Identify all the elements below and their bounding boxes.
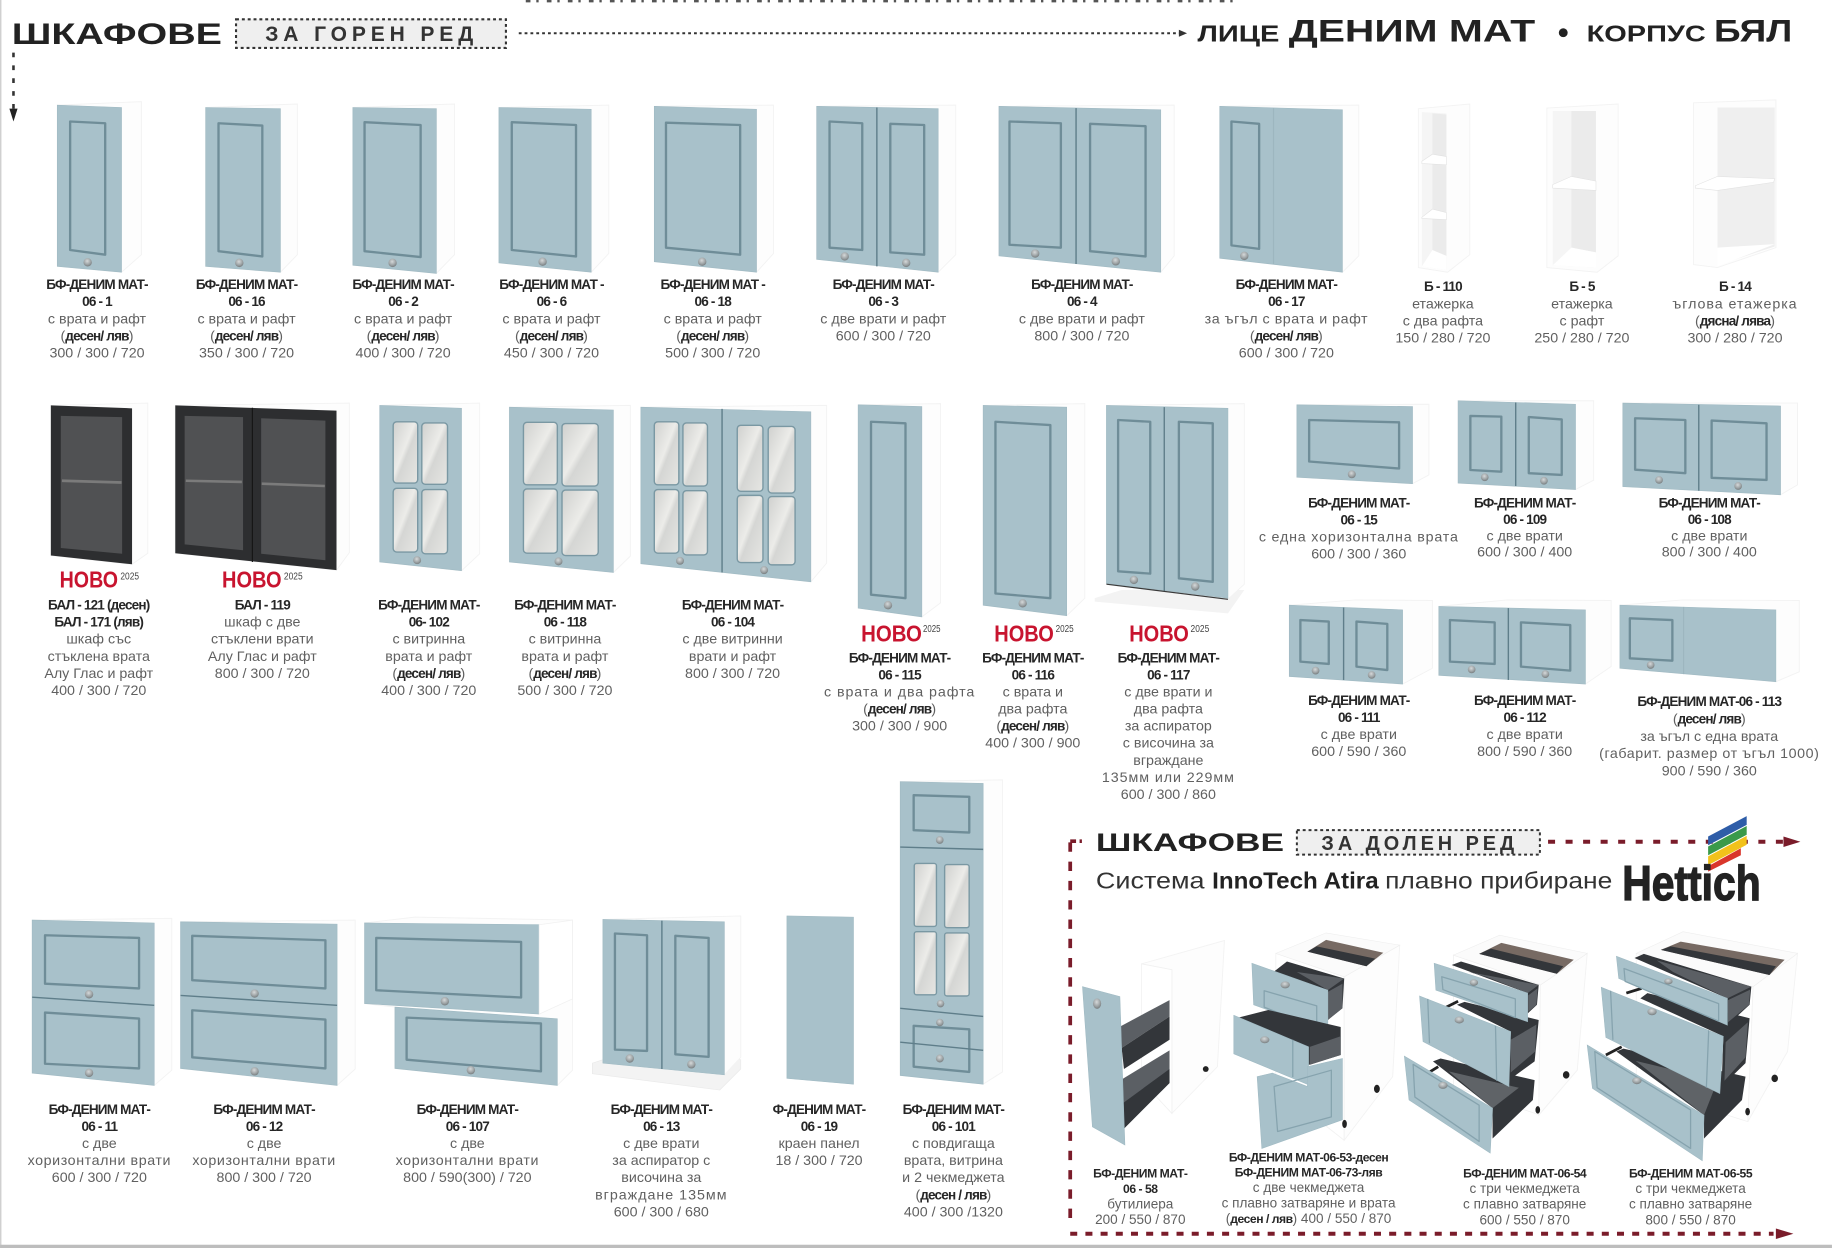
product: 06-58 (1082, 940, 1224, 1227)
label: краен панел (778, 1136, 860, 1152)
label: 06 - 118 (544, 614, 587, 629)
label: ъглова етажерка (1672, 296, 1798, 312)
label: 06 - 13 (643, 1119, 681, 1134)
label: 450 / 300 / 720 (504, 345, 599, 361)
cabinet (1620, 600, 1799, 682)
product: Б-110 (1395, 104, 1491, 347)
label: 800 / 590(300) / 720 (403, 1170, 532, 1186)
label: с врата и (1003, 685, 1063, 701)
label: с три чекмеджета (1635, 1181, 1746, 1196)
subtitle: система innotech atira: InnoTech Atira (1212, 868, 1380, 894)
subtitle: система innotech atira: плавно прибиране (1385, 868, 1612, 894)
label: (десен/ ляв) (1250, 328, 1323, 344)
label: БФ-ДЕНИМ МАТ-06-73-ляв (1235, 1165, 1382, 1179)
product: 06-53 / 06-73 (1222, 933, 1400, 1226)
badge: за горен ред: ЗА ГОРЕН РЕД (265, 23, 473, 46)
label: 600 / 300 / 720 (52, 1170, 147, 1186)
label: 800 / 550 / 870 (1645, 1212, 1736, 1227)
label: 06 - 15 (1341, 513, 1378, 528)
label: БФ-ДЕНИМ МАТ- (417, 1102, 518, 1117)
label: 600 / 300 / 360 (1311, 546, 1406, 562)
product: 06-11 (28, 918, 172, 1186)
label: 600 / 590 / 360 (1311, 744, 1406, 760)
product: 06-55 (1587, 932, 1797, 1227)
label: БФ-ДЕНИМ МАТ- (849, 650, 951, 665)
label: с три чекмеджета (1470, 1181, 1580, 1196)
product: 06-6 (499, 105, 609, 361)
label: бутилиера (1107, 1196, 1174, 1211)
label: врата и рафт (521, 649, 609, 665)
label: стъклени врати (211, 632, 314, 648)
product: 06-112 (1439, 600, 1611, 760)
label: БФ-ДЕНИМ МАТ- (903, 1102, 1004, 1117)
label: два рафта (1134, 702, 1203, 718)
product: 06-12 (181, 920, 355, 1186)
label: 300 / 300 / 720 (49, 345, 145, 361)
label: 300 / 280 / 720 (1687, 331, 1783, 347)
label: БФ-ДЕНИМ МАТ- (196, 277, 298, 292)
heading: лице деним мат, корпус бял (1198, 12, 1792, 48)
label: 800 / 300 / 720 (1034, 328, 1130, 344)
product: 06-118 (509, 405, 630, 699)
label: 500 / 300 / 720 (517, 683, 613, 699)
product: Б-14 (1672, 100, 1798, 347)
label: 06 - 115 (878, 667, 922, 682)
label: Б - 110 (1424, 279, 1462, 294)
label: БФ-ДЕНИМ МАТ- (352, 277, 454, 292)
label: 250 / 280 / 720 (1534, 331, 1630, 347)
label: 06 - 17 (1268, 294, 1305, 309)
label: 600 / 300 / 720 (1239, 345, 1334, 361)
label: с врата и рафт (664, 311, 762, 327)
label: БФ-ДЕНИМ МАТ - (499, 277, 604, 292)
label: 06 - 11 (81, 1119, 118, 1134)
badge: ново 2025: 2025 (120, 570, 139, 582)
label: 600 / 550 / 870 (1479, 1212, 1570, 1227)
cabinet: black glass doors (175, 403, 349, 570)
open shelf unit (1418, 104, 1470, 272)
label: БФ-ДЕНИМ МАТ- (1474, 693, 1576, 708)
label: с врата и два рафта (824, 685, 975, 701)
cabinet (1623, 403, 1797, 495)
label: 06 - 107 (446, 1119, 489, 1134)
product: 06-15 (1259, 404, 1459, 562)
cabinet (353, 104, 455, 273)
label: с повдигаща (912, 1136, 995, 1152)
label: с врата и рафт (48, 311, 147, 327)
label: 800 / 300 / 720 (685, 666, 780, 682)
label: с плавно затваряне и врата (1222, 1196, 1396, 1211)
label: (десен/ ляв) (515, 328, 588, 344)
badge: ново 2025: НОВО (861, 620, 922, 646)
badge: ново 2025: НОВО (994, 620, 1054, 646)
cabinet (983, 404, 1085, 616)
label: с два рафта (1403, 313, 1483, 329)
product: 06-104 (641, 405, 827, 682)
title: ШКАФОВЕ: ШКАФОВЕ (12, 19, 222, 51)
label: 135мм или 229мм (1102, 770, 1235, 786)
product: 06-108 (1623, 403, 1797, 561)
heading: лице деним мат, корпус бял: ЛИЦЕ (1198, 20, 1279, 46)
label: (десен/ ляв) (996, 719, 1069, 735)
label: БФ-ДЕНИМ МАТ- (213, 1102, 315, 1117)
label: 06 - 2 (388, 294, 418, 309)
label: БАЛ - 119 (235, 597, 291, 612)
label: БФ-ДЕНИМ МАТ-06-54 (1463, 1167, 1587, 1181)
label: 600 / 300 / 720 (836, 328, 931, 344)
cabinet: three wide drawers (1587, 932, 1797, 1161)
product: 06-101 (900, 780, 1005, 1220)
label: с две врати (1321, 727, 1397, 743)
label: 06 - 12 (246, 1119, 283, 1134)
label: БФ-ДЕНИМ МАТ-06-55 (1629, 1167, 1753, 1181)
arrow: vertical dashed (9, 53, 18, 122)
label: (десен / ляв) (915, 1187, 991, 1203)
badge: ново 2025: 2025 (1191, 623, 1209, 635)
header: top row (9, 12, 1792, 122)
label: БФ-ДЕНИМ МАТ - (661, 277, 765, 292)
product: 06-19 (773, 916, 866, 1169)
label: шкаф с две (224, 614, 301, 630)
badge: за горен ред (236, 19, 506, 48)
badge: ново 2025: 2025 (923, 623, 941, 635)
logo: hettich: Hettich (1622, 857, 1761, 911)
label: (габарит. размер от ъгъл 1000) (1599, 746, 1819, 762)
product: 06-109 (1458, 401, 1594, 561)
cabinet (57, 102, 141, 272)
label: 600 / 300 / 680 (614, 1204, 709, 1220)
label: стъклена врата (48, 649, 150, 665)
label: 06 - 18 (694, 294, 732, 309)
badge: ново 2025: 2025 (1056, 623, 1074, 635)
arrow: horizontal dotted (519, 30, 1187, 37)
label: (десен/ ляв) (210, 328, 283, 344)
label: 06- 102 (409, 614, 449, 629)
cabinet (654, 105, 773, 272)
subtitle: система innotech atira (1096, 868, 1612, 894)
label: с две (82, 1136, 117, 1152)
cabinet (1297, 404, 1429, 484)
cabinet (181, 920, 355, 1085)
label: с врата и рафт (502, 311, 601, 327)
label: БФ-ДЕНИМ МАТ- (1308, 693, 1410, 708)
heading: лице деним мат, корпус бял: ДЕНИМ МАТ (1289, 12, 1535, 48)
label: вграждане 135мм (595, 1187, 728, 1203)
label: с врата и рафт (197, 311, 296, 327)
label: 06 - 117 (1147, 667, 1190, 682)
label: (десен/ ляв) (1673, 712, 1746, 728)
label: Алу Глас и рафт (44, 666, 154, 682)
product: 06-115 (824, 404, 975, 735)
label: БФ-ДЕНИМ МАТ- (49, 1102, 150, 1117)
label: с две врати (1487, 727, 1563, 743)
label: врата и рафт (385, 649, 473, 665)
open shelf unit (1547, 104, 1618, 272)
product: 06-2 (352, 104, 455, 361)
cabinet: black glass door (51, 403, 148, 564)
cabinet (206, 104, 297, 272)
label: два рафта (998, 702, 1067, 718)
cabinet with extractor slab (592, 916, 741, 1090)
label: 400 / 300 / 720 (381, 683, 476, 699)
label: (десен/ ляв) (863, 702, 936, 718)
label: (десен / ляв) 400 / 550 / 870 (1226, 1211, 1391, 1226)
label: 800 / 300 / 720 (217, 1170, 312, 1186)
label: БФ-ДЕНИМ МАТ- (1659, 496, 1760, 511)
cabinet (817, 105, 956, 272)
cabinet (1439, 600, 1611, 684)
label: с две витринни (682, 632, 783, 648)
label: 800 / 300 / 720 (215, 666, 310, 682)
label: БАЛ - 121 (десен) (48, 597, 150, 612)
cabinet (499, 105, 609, 272)
label: Ф-ДЕНИМ МАТ- (773, 1102, 866, 1117)
badge: ново 2025: НОВО (1129, 620, 1189, 646)
cabinet (1220, 105, 1359, 272)
label: БФ-ДЕНИМ МАТ- (378, 597, 480, 612)
label: 150 / 280 / 720 (1395, 331, 1491, 347)
label: БФ-ДЕНИМ МАТ- (1118, 650, 1219, 665)
label: 06 - 19 (801, 1119, 839, 1134)
label: Б - 5 (1569, 279, 1596, 294)
label: с две врати и рафт (1019, 311, 1145, 327)
label: с врата и рафт (354, 311, 453, 327)
label: БФ-ДЕНИМ МАТ- (1031, 277, 1133, 292)
product: 06-13 (592, 916, 741, 1220)
label: БФ-ДЕНИМ МАТ- (514, 597, 616, 612)
label: 400 / 300 / 900 (985, 736, 1080, 752)
label: БФ-ДЕНИМ МАТ- (1308, 496, 1410, 511)
corner shelf unit (1694, 100, 1776, 268)
label: 06 - 4 (1067, 294, 1098, 309)
label: (десен/ ляв) (676, 328, 749, 344)
label: етажерка (1551, 296, 1613, 312)
label: БАЛ - 171 (ляв) (54, 614, 143, 629)
heading: шкафове: ШКАФОВЕ (1096, 830, 1284, 857)
label: 18 / 300 / 720 (775, 1153, 863, 1169)
label: БФ-ДЕНИМ МАТ- (46, 277, 148, 292)
label: с две (247, 1136, 282, 1152)
product: 06-113 (1599, 600, 1819, 779)
label: шкаф със (66, 632, 131, 648)
label: 06 - 6 (537, 294, 568, 309)
cabinet: bottle rack (1082, 940, 1224, 1145)
label: хоризонтални врати (396, 1153, 539, 1169)
label: 400 / 300 / 720 (356, 345, 451, 361)
label: 900 / 590 / 360 (1662, 763, 1757, 779)
label: с две чекмеджета (1253, 1180, 1365, 1195)
label: с две врати (1487, 528, 1563, 544)
label: БФ-ДЕНИМ МАТ- (682, 597, 784, 612)
label: врати и рафт (689, 649, 777, 665)
label: 400 / 300 /1320 (904, 1204, 1003, 1220)
cabinet (32, 918, 172, 1085)
label: 200 / 550 / 870 (1095, 1212, 1186, 1227)
badge: за долен ред: ЗА ДОЛЕН РЕД (1321, 833, 1514, 855)
cabinet: two drawers and door (1234, 933, 1400, 1148)
subtitle: система innotech atira: Система (1096, 868, 1205, 894)
cabinet (1458, 401, 1594, 490)
label: хоризонтални врати (192, 1153, 336, 1169)
label: с две врати (1671, 528, 1747, 544)
label: с височина за (1123, 736, 1214, 752)
label: за аспиратор (1125, 719, 1212, 735)
product: 06-3 (817, 105, 956, 344)
label: 800 / 590 / 360 (1477, 744, 1572, 760)
product: 06-117 (1095, 404, 1244, 803)
label: БФ-ДЕНИМ МАТ- (982, 650, 1084, 665)
product: 06-1 (46, 102, 148, 361)
label: врата, витрина (904, 1153, 1003, 1169)
label: с две врати и рафт (820, 311, 947, 327)
product: 06-4 (999, 105, 1174, 344)
label: за ъгъл с врата и рафт (1205, 311, 1368, 327)
product: 06-111 (1289, 600, 1432, 760)
label: 06 - 108 (1688, 512, 1732, 527)
product: БАЛ-119 (175, 403, 349, 682)
label: етажерка (1412, 296, 1474, 312)
label: 06 - 58 (1123, 1182, 1158, 1196)
label: 06 - 111 (1338, 710, 1381, 725)
label: (дясна/ лява) (1695, 313, 1775, 329)
label: с две врати (623, 1136, 699, 1152)
product: 06-18 (654, 105, 773, 361)
cabinet: glass door (380, 403, 480, 571)
heading: лице деним мат, корпус бял: КОРПУС (1587, 20, 1706, 46)
label: 500 / 300 / 720 (665, 345, 760, 361)
label: 400 / 300 / 720 (51, 683, 146, 699)
label: 06 - 101 (932, 1119, 976, 1134)
label: БФ-ДЕНИМ МАТ-06-53-десен (1229, 1150, 1388, 1164)
label: Алу Глас и рафт (208, 649, 317, 665)
label: хоризонтални врати (28, 1153, 171, 1169)
product: Б-5 (1534, 104, 1630, 347)
label: 800 / 300 / 400 (1662, 545, 1757, 561)
label: БФ-ДЕНИМ МАТ- (1236, 277, 1337, 292)
label: БФ-ДЕНИМ МАТ- (1474, 496, 1576, 511)
label: БФ-ДЕНИМ МАТ- (611, 1102, 712, 1117)
label: височина за (621, 1170, 701, 1186)
label: с плавно затваряне (1629, 1197, 1752, 1212)
badge: ново 2025: НОВО (222, 567, 282, 593)
label: (десен/ ляв) (61, 328, 133, 344)
product: 06-102 (378, 403, 480, 699)
cabinet with extractor slab (1095, 404, 1244, 613)
label: с витринна (529, 632, 601, 648)
label: за ъгъл с една врата (1640, 729, 1778, 745)
label: 600 / 300 / 400 (1477, 545, 1572, 561)
label: 06 - 16 (228, 294, 266, 309)
label: 600 / 300 / 860 (1121, 787, 1216, 803)
label: 06 - 109 (1503, 512, 1548, 527)
label: Б - 14 (1719, 279, 1752, 294)
product: 06-16 (196, 104, 298, 361)
product: 06-17 (1205, 105, 1368, 361)
label: с една хоризонтална врата (1259, 530, 1459, 546)
cabinet (999, 105, 1174, 272)
label: БФ-ДЕНИМ МАТ- (833, 277, 934, 292)
label: 06 - 112 (1503, 710, 1546, 725)
badge: ново 2025: 2025 (284, 570, 303, 582)
label: с плавно затваряне (1463, 1197, 1586, 1212)
product: 06-54 (1404, 935, 1587, 1227)
cabinet: three drawers (1404, 935, 1587, 1153)
tall cabinet (900, 780, 1002, 1084)
product: 06-116 (982, 404, 1085, 752)
label: с витринна (392, 632, 465, 648)
label: 06 - 116 (1012, 667, 1055, 682)
heading: лице деним мат, корпус бял: БЯЛ (1714, 12, 1792, 48)
label: с рафт (1560, 313, 1605, 329)
panel: за долен ред (1070, 816, 1800, 1239)
cabinet (858, 404, 941, 617)
label: (десен/ ляв) (528, 666, 601, 682)
badge: ново 2025: НОВО (60, 567, 118, 593)
label: 06 - 104 (711, 614, 755, 629)
label: с две (450, 1136, 485, 1152)
cabinet (1289, 600, 1432, 684)
cabinet: two glass doors (641, 405, 827, 582)
label: за аспиратор с (612, 1153, 710, 1169)
label: с две врати и (1124, 685, 1212, 701)
label: 300 / 300 / 900 (852, 719, 947, 735)
label: и 2 чекмеджета (902, 1170, 1005, 1186)
label: (десен/ ляв) (367, 328, 440, 344)
end panel (787, 916, 853, 1084)
label: 06 - 3 (868, 294, 899, 309)
product: 06-107 (365, 917, 573, 1186)
label: вграждане (1133, 753, 1204, 769)
label: 06 - 1 (82, 294, 113, 309)
label: БФ-ДЕНИМ МАТ- (1093, 1167, 1188, 1181)
cabinet (365, 917, 573, 1085)
label: БФ-ДЕНИМ МАТ-06 - 113 (1637, 694, 1782, 709)
label: 350 / 300 / 720 (199, 345, 294, 361)
logo: hettich (1622, 816, 1761, 911)
label: (десен/ ляв) (392, 666, 465, 682)
product: БАЛ-121 (44, 403, 154, 699)
cabinet: glass door (509, 405, 630, 572)
frame: dashed maroon border with arrows (1070, 837, 1800, 1239)
